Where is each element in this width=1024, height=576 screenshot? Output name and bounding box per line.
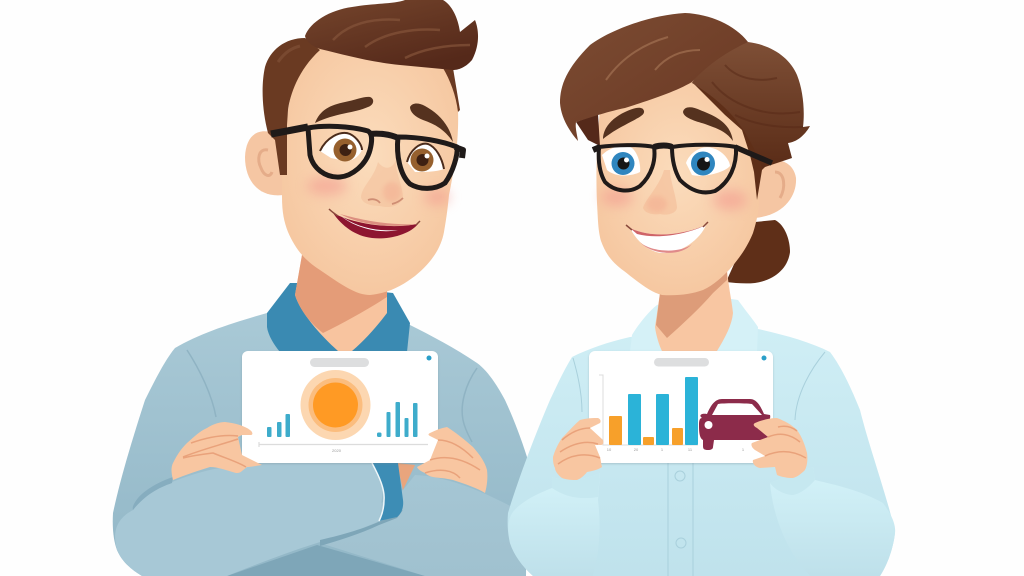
sun circle	[300, 370, 370, 440]
left bars	[267, 414, 290, 437]
man glasses	[271, 126, 463, 188]
woman hands and card	[553, 351, 807, 480]
man figure	[113, 0, 527, 576]
man hands and card	[172, 351, 487, 493]
man blush	[307, 177, 450, 205]
axis labels: 20	[634, 447, 639, 452]
woman right forearm	[770, 467, 895, 576]
man right hand	[417, 427, 487, 493]
woman collar	[630, 298, 758, 352]
man cuff	[372, 463, 415, 521]
axis label: 2020	[332, 448, 342, 453]
woman figure	[508, 13, 895, 576]
right bars	[377, 402, 418, 437]
woman ponytail	[726, 220, 790, 283]
woman glasses	[593, 145, 772, 192]
woman mouth	[626, 222, 708, 253]
woman left forearm	[508, 473, 600, 576]
woman neck	[655, 265, 733, 351]
man eyebrows	[315, 97, 453, 142]
shirt buttons	[675, 471, 686, 548]
woman right hand	[751, 418, 807, 478]
axis labels: 11	[688, 447, 693, 452]
man face	[282, 40, 458, 295]
axis labels	[607, 447, 745, 452]
woman shirt	[508, 329, 895, 576]
woman eyebrows	[603, 107, 733, 141]
woman blush	[601, 188, 747, 210]
woman nose	[643, 170, 677, 215]
man neck	[295, 255, 387, 351]
man nose	[361, 160, 403, 207]
man ear	[245, 131, 283, 195]
bar chart	[609, 377, 698, 445]
man front forearm	[115, 463, 383, 576]
man left hand	[172, 422, 262, 480]
axis labels: 1	[661, 447, 664, 452]
axis labels: 10	[607, 447, 612, 452]
woman ear	[752, 160, 796, 218]
man elbow crease	[133, 477, 173, 510]
man sweater	[113, 313, 527, 576]
man eyes	[320, 133, 444, 172]
man collar	[267, 283, 410, 352]
man back forearm	[320, 475, 526, 576]
axis labels: 1	[742, 447, 745, 452]
woman eyes	[602, 146, 730, 176]
man hair	[263, 0, 478, 175]
man mouth	[329, 209, 420, 238]
man lower torso shadow	[227, 545, 425, 576]
woman left hand	[553, 418, 603, 480]
icon: car	[699, 399, 770, 450]
chart card: bars and car	[589, 351, 773, 463]
chart card: sun and bars	[242, 351, 438, 463]
woman face	[596, 75, 759, 295]
woman hair	[560, 13, 810, 200]
